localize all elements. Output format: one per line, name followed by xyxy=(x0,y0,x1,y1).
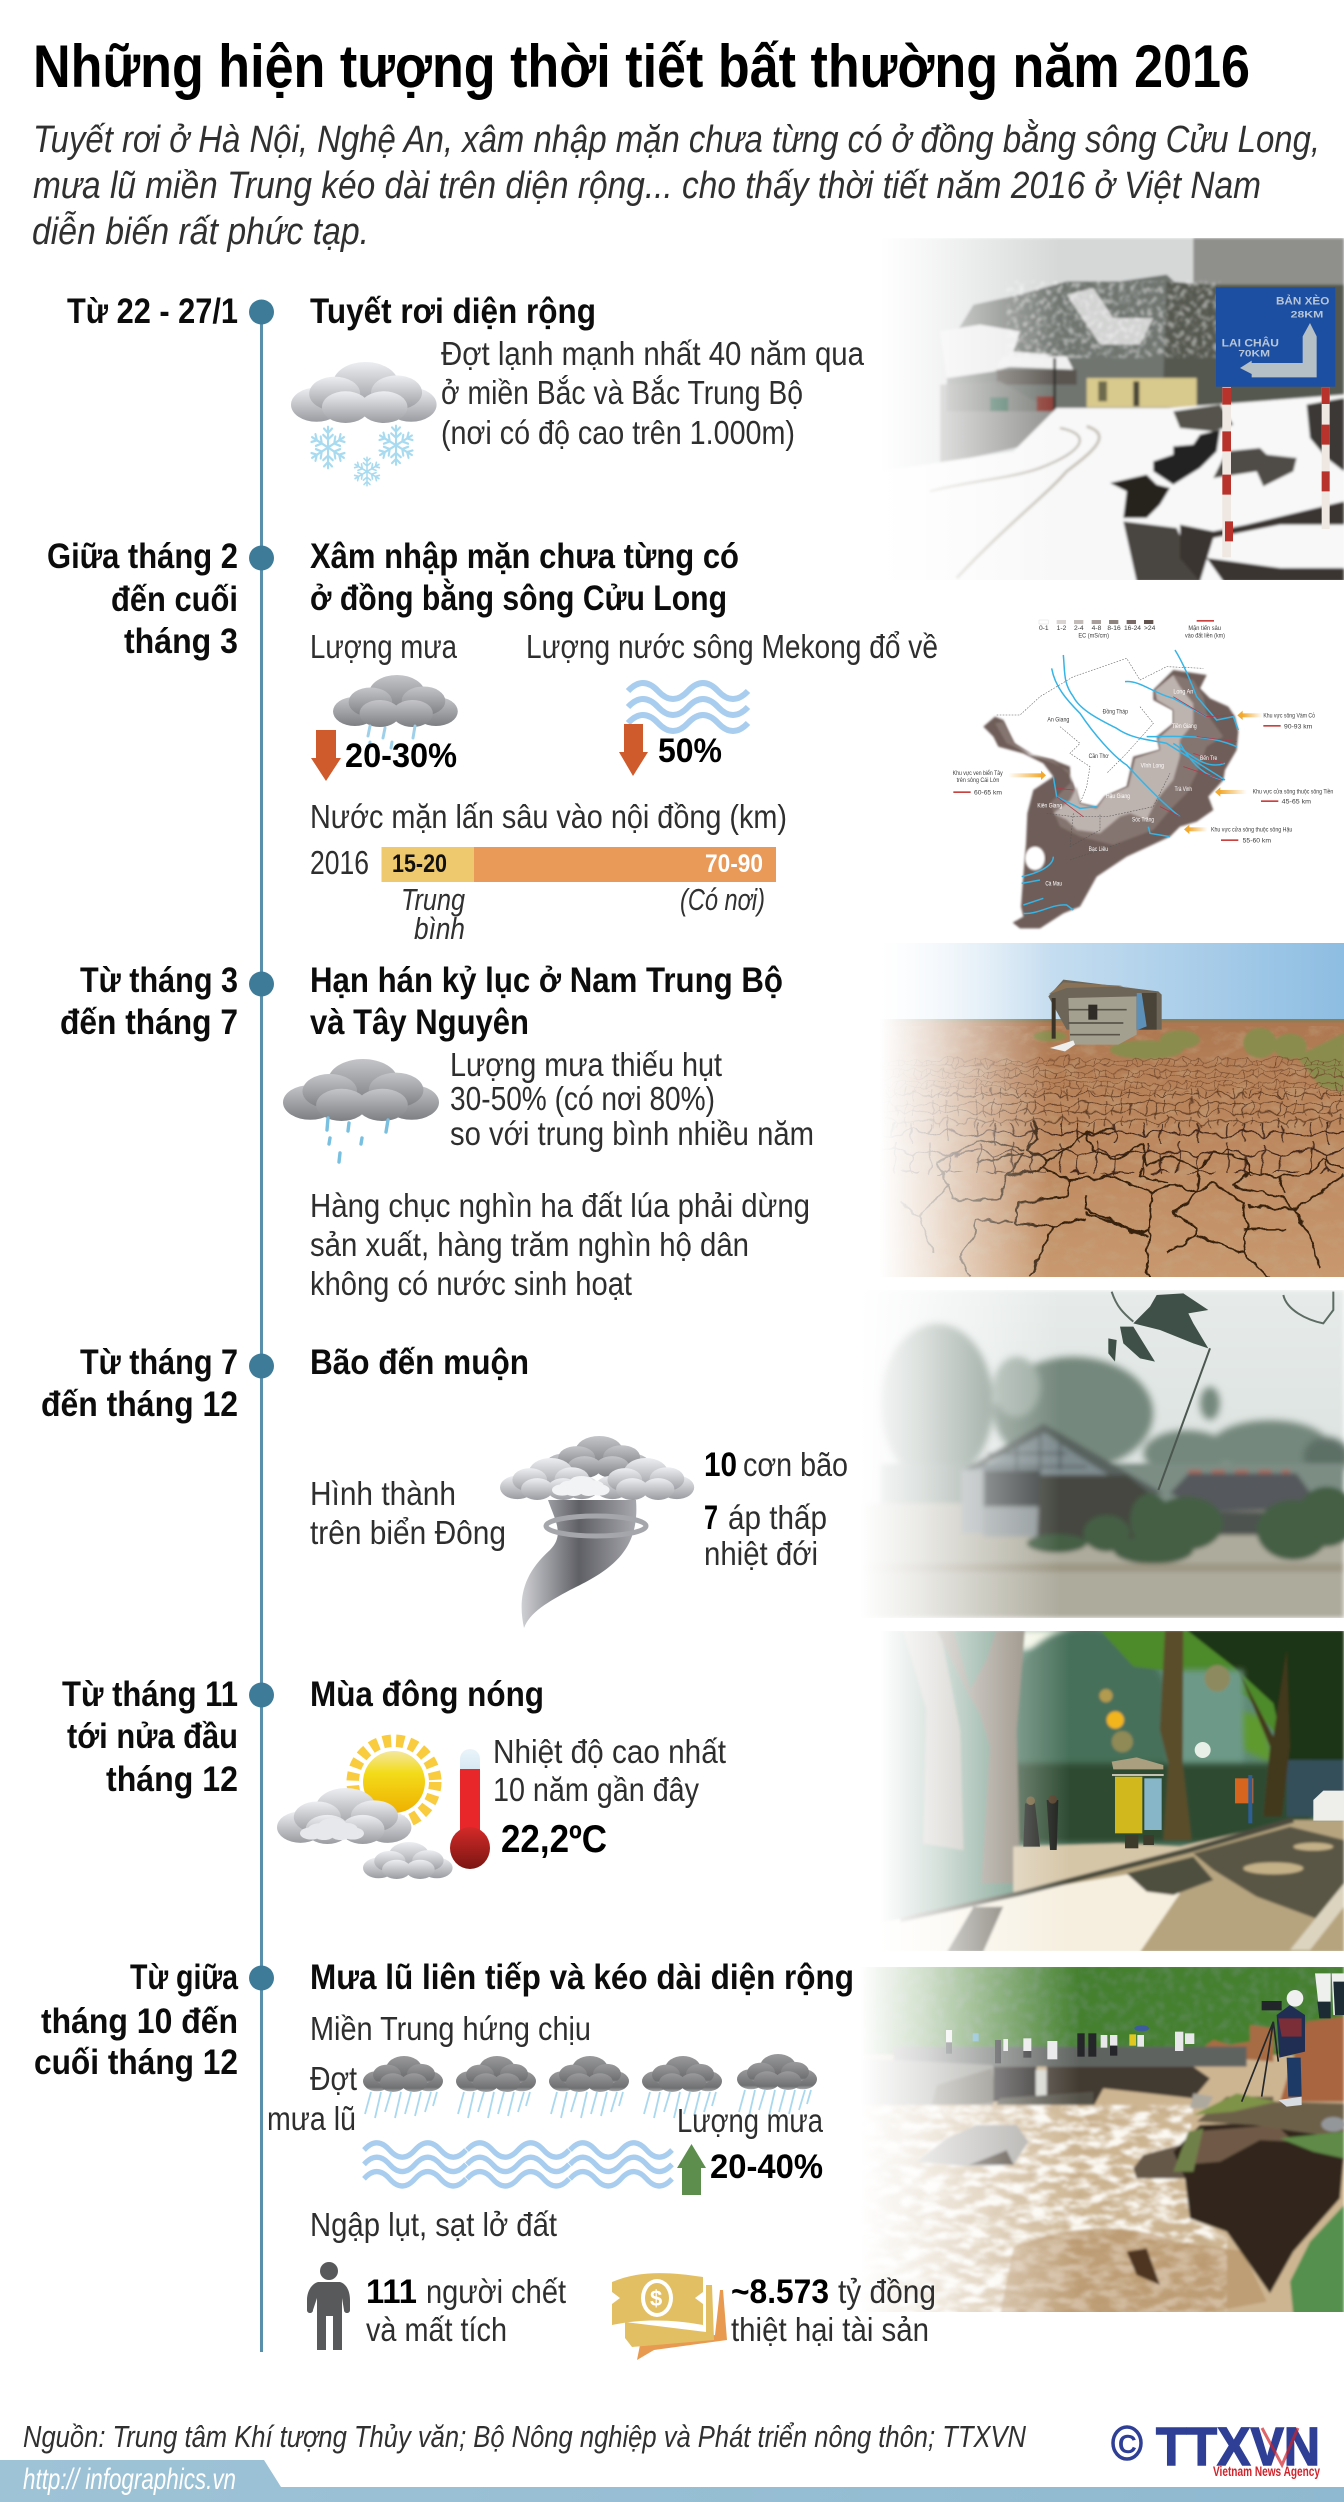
heading: Tuyết rơi diện rộng xyxy=(310,292,596,331)
heading: ở đồng bằng sông Cửu Long xyxy=(310,578,727,618)
description: (nơi có độ cao trên 1.000m) xyxy=(441,414,795,451)
icon: person xyxy=(307,2262,350,2350)
map place labels: Sóc Trăng xyxy=(1132,817,1154,823)
heading: Bão đến muộn xyxy=(310,1343,529,1382)
map: Mekong delta salinity xyxy=(953,620,1334,928)
map place labels: Cần Thơ xyxy=(1089,751,1109,760)
property damage: thiệt hại tài sản xyxy=(731,2311,929,2348)
casualties xyxy=(366,2273,566,2348)
map province borders xyxy=(997,658,1203,860)
map saline reach lines xyxy=(1057,697,1237,817)
map legend xyxy=(1039,620,1225,640)
icon: money stack: $ xyxy=(650,2286,662,2311)
panel: snow, 22-27 January xyxy=(67,292,865,486)
icon: five rain clouds xyxy=(363,2054,817,2118)
formation text: Hình thành xyxy=(310,1475,456,1512)
date: đến cuối xyxy=(111,580,238,619)
map place labels: Kiên Giang xyxy=(1037,803,1062,809)
map place labels: Vĩnh Long xyxy=(1141,763,1164,769)
casualties: và mất tích xyxy=(366,2311,507,2348)
intro text: diễn biến rất phức tạp. xyxy=(32,209,369,253)
map place labels: Cà Mau xyxy=(1045,881,1062,887)
map place labels: Đồng Tháp xyxy=(1103,706,1128,715)
map legend: >24 xyxy=(1144,625,1156,632)
timeline dot xyxy=(249,300,274,324)
date xyxy=(41,1343,238,1424)
date xyxy=(47,537,238,661)
map place labels: Tiền Giang xyxy=(1172,724,1197,730)
photo: snow-covered road with sign xyxy=(880,238,1344,581)
photo: cracked dry earth with hut xyxy=(880,943,1344,1286)
logo: TTXVN: TTXVN xyxy=(1156,2417,1320,2477)
impact text: Ngập lụt, sạt lở đất xyxy=(310,2206,557,2243)
map place labels: Hậu Giang xyxy=(1106,794,1130,800)
description xyxy=(493,1733,726,1808)
storm counts xyxy=(704,1446,848,1572)
timeline dot xyxy=(249,1682,274,1708)
heading: Mưa lũ liên tiếp và kéo dài diện rộng xyxy=(310,1958,854,1997)
date: cuối tháng 12 xyxy=(34,2043,238,2082)
storm counts: 10 xyxy=(704,1446,737,1484)
flood waves label: Đợt xyxy=(310,2060,357,2097)
date xyxy=(34,1958,238,2082)
timeline dot xyxy=(249,1966,274,1990)
date: Từ tháng 3 xyxy=(80,961,238,1000)
salinity bar chart xyxy=(310,844,776,946)
panel: prolonged floods xyxy=(34,1958,936,2360)
date: tháng 10 đến xyxy=(41,2002,238,2041)
photo: muddy flood with eroded bank xyxy=(870,1967,1344,2312)
icon: money stack xyxy=(612,2273,727,2360)
description: Lượng mưa thiếu hụt xyxy=(450,1046,722,1083)
salinity bar chart: (Có nơi) xyxy=(680,882,765,917)
date: Từ tháng 7 xyxy=(80,1343,238,1382)
map place labels xyxy=(1037,689,1218,887)
flood waves label xyxy=(267,2060,357,2137)
map place labels: Long An xyxy=(1173,689,1193,695)
impact text: Hàng chục nghìn ha đất lúa phải dừng xyxy=(310,1187,810,1224)
panel: late storms xyxy=(41,1343,848,1628)
casualties: 111 xyxy=(366,2273,417,2311)
photo: snow-covered road with sign: BẢN XÈO xyxy=(1276,295,1329,308)
map legend: vào đất liền (km) xyxy=(1185,631,1225,640)
icon: sun and clouds xyxy=(277,1741,453,1879)
map place labels: Bạc Liêu xyxy=(1089,847,1108,853)
heading: Mùa đông nóng xyxy=(310,1675,544,1714)
timeline dot xyxy=(249,972,274,996)
date xyxy=(60,961,238,1042)
map place labels: Bến Tre xyxy=(1200,756,1218,762)
timeline axis xyxy=(260,312,263,2352)
storm counts: 7 xyxy=(704,1499,718,1537)
map callouts: 55-60 km xyxy=(1243,838,1271,845)
icon: flood waves xyxy=(364,2143,672,2186)
region text: Miền Trung hứng chịu xyxy=(310,2010,591,2047)
map legend: 4-8 xyxy=(1092,625,1102,632)
temperature value: 22,2ºC xyxy=(501,1818,607,1861)
heading xyxy=(310,961,783,1042)
map callouts xyxy=(953,711,1334,845)
map callouts: trên sông Cái Lớn xyxy=(957,777,1000,784)
map legend: 1-2 xyxy=(1057,625,1067,632)
date: Từ 22 - 27/1 xyxy=(67,292,238,331)
arrow: rainfall down xyxy=(311,730,341,781)
map callouts: 45-65 km xyxy=(1282,799,1311,806)
icon: rain cloud with drops xyxy=(283,1059,439,1162)
description: 10 năm gần đây xyxy=(493,1771,699,1808)
heading: Hạn hán kỷ lục ở Nam Trung Bộ xyxy=(310,961,783,1000)
description: ở miền Bắc và Bắc Trung Bộ xyxy=(441,374,803,411)
panel: warm winter xyxy=(62,1675,726,1879)
photo: sunny street with trees xyxy=(880,1627,1344,1952)
map place labels: An Giang xyxy=(1047,717,1070,724)
map legend: Mặn tiến sâu xyxy=(1188,623,1221,632)
photo: snow-covered road with sign: 28KM xyxy=(1291,309,1324,319)
heading xyxy=(310,537,739,618)
salinity bar chart: Trung xyxy=(401,882,465,917)
property damage: ~8.573 xyxy=(731,2273,829,2311)
description: Đợt lạnh mạnh nhất 40 năm qua xyxy=(441,335,865,372)
photo: snow-covered road with sign: LAI CHÂU xyxy=(1222,337,1279,350)
icon: water waves xyxy=(628,683,748,731)
panel: saline intrusion in Mekong delta xyxy=(47,537,1334,946)
formation text xyxy=(310,1475,506,1551)
casualties: người chết xyxy=(426,2273,566,2310)
arrow: rainfall up xyxy=(677,2144,706,2195)
map legend: 0-1 xyxy=(1039,625,1049,632)
map legend: EC (mS/cm) xyxy=(1078,633,1109,640)
salinity bar chart: bình xyxy=(414,911,465,946)
date: đến tháng 7 xyxy=(60,1003,238,1042)
photo: storm hitting houses xyxy=(860,1290,1344,1618)
logo: TTXVN: C xyxy=(1118,2429,1137,2459)
salinity bar chart: 2016 xyxy=(310,844,369,881)
date: tới nửa đầu xyxy=(67,1717,238,1756)
impact text xyxy=(310,1187,810,1302)
description xyxy=(441,335,865,451)
salinity bar chart: 70-90 xyxy=(705,850,763,878)
map rivers xyxy=(1022,650,1238,913)
map land salinity bands xyxy=(983,670,1238,928)
panel: record drought xyxy=(60,961,814,1302)
timeline dot xyxy=(249,546,274,570)
description: so với trung bình nhiều năm xyxy=(450,1115,814,1152)
heading: và Tây Nguyên xyxy=(310,1003,529,1042)
date: tháng 12 xyxy=(106,1760,238,1799)
icon: rain cloud xyxy=(333,675,458,748)
storm counts: áp thấp xyxy=(728,1499,827,1536)
flow value: 50% xyxy=(658,732,722,770)
icon: snow cloud xyxy=(291,362,437,486)
description xyxy=(450,1046,814,1152)
salinity bar chart: 15-20 xyxy=(392,850,447,878)
map legend: 8-16 xyxy=(1107,625,1121,632)
footer url: http:// infographics.vn xyxy=(23,2463,236,2496)
formation text: trên biển Đông xyxy=(310,1514,506,1551)
map place labels: Trà Vinh xyxy=(1175,787,1192,793)
map callouts: 90-93 km xyxy=(1284,723,1313,730)
date xyxy=(62,1675,238,1799)
footer bar xyxy=(0,2460,1344,2502)
icon: thermometer xyxy=(450,1749,490,1869)
property damage xyxy=(731,2273,936,2348)
date: Từ giữa xyxy=(130,1958,238,1997)
icon: tornado xyxy=(500,1436,694,1628)
map callouts: 60-65 km xyxy=(974,790,1002,797)
storm counts: nhiệt đới xyxy=(704,1535,818,1572)
rainfall label: Lượng mưa xyxy=(677,2102,824,2139)
storm counts: cơn bão xyxy=(743,1446,848,1483)
map legend: 16-24 xyxy=(1124,625,1141,632)
description: 30-50% (có nơi 80%) xyxy=(450,1080,715,1117)
source note: Nguồn: Trung tâm Khí tượng Thủy văn; Bộ Nông nghiệp và Phát triển nông thôn; TTXVN xyxy=(23,2419,1026,2454)
date: tháng 3 xyxy=(124,622,238,661)
heading: Xâm nhập mặn chưa từng có xyxy=(310,537,739,576)
date: đến tháng 12 xyxy=(41,1385,238,1424)
map legend: 2-4 xyxy=(1074,625,1084,632)
rainfall value: 20-40% xyxy=(710,2148,823,2186)
map callouts: Khu vực cửa sông thuộc sông Hậu xyxy=(1211,826,1293,834)
map callouts: Khu vực ven biển Tây xyxy=(953,769,1003,777)
photo: snow-covered road with sign: 70KM xyxy=(1238,349,1270,359)
timeline dot xyxy=(249,1354,274,1378)
property damage: tỷ đồng xyxy=(838,2273,936,2310)
date: Giữa tháng 2 xyxy=(47,537,238,576)
Mekong flow label: Lượng nước sông Mekong đổ về xyxy=(526,628,938,665)
map callouts: Khu vực sông Vàm Cỏ xyxy=(1263,711,1315,719)
impact text: sản xuất, hàng trăm nghìn hộ dân xyxy=(310,1226,749,1263)
arrow: flow down xyxy=(619,724,648,776)
flood waves label: mưa lũ xyxy=(267,2100,356,2137)
rainfall label: Lượng mưa xyxy=(310,628,458,665)
rainfall value: 20-30% xyxy=(345,737,457,775)
description: Nhiệt độ cao nhất xyxy=(493,1733,726,1770)
salinity label: Nước mặn lấn sâu vào nội đồng (km) xyxy=(310,798,787,835)
date: Từ tháng 11 xyxy=(62,1675,238,1714)
impact text: không có nước sinh hoạt xyxy=(310,1265,632,1302)
intro text xyxy=(32,118,1320,253)
